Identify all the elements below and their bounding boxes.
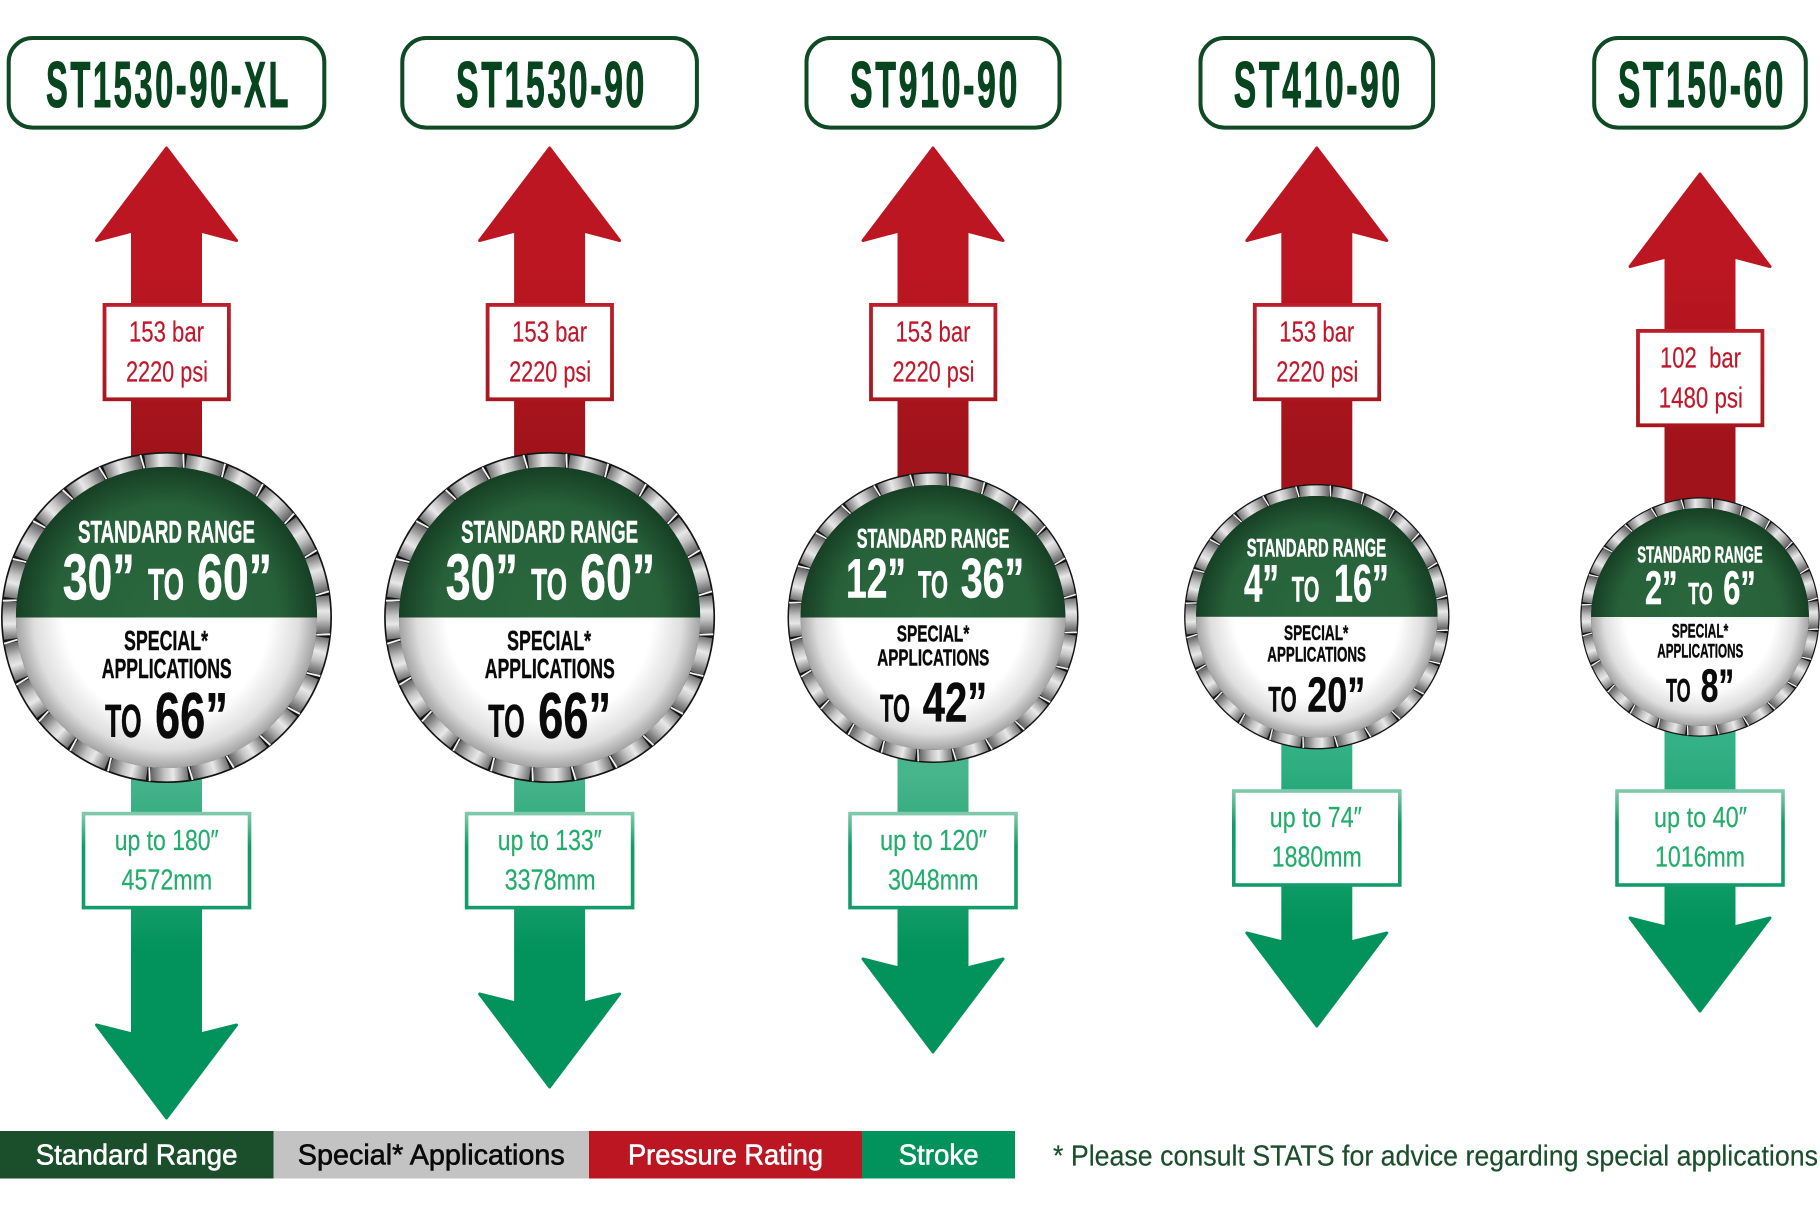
arrow: stroke down xyxy=(1247,640,1387,1026)
range dial: SPECIAL* xyxy=(507,625,591,656)
arrow: stroke down xyxy=(96,640,236,1118)
arrow: stroke down xyxy=(480,640,620,1087)
stroke label xyxy=(84,814,250,908)
range dial: TO xyxy=(488,695,525,747)
panel: ST1530-90 column xyxy=(384,38,715,1087)
range dial: TO xyxy=(918,563,948,605)
range dial: 30” xyxy=(446,540,518,613)
stroke label: up to 180″ xyxy=(115,825,219,857)
range dial: APPLICATIONS xyxy=(102,653,232,684)
stroke label: up to 120″ xyxy=(880,825,987,857)
range dial: SPECIAL* xyxy=(897,621,970,647)
pressure rating label xyxy=(1255,305,1379,399)
stroke label: 4572mm xyxy=(122,864,212,896)
range dial: APPLICATIONS xyxy=(877,645,989,671)
range dial: TO xyxy=(105,695,142,747)
model heading: ST1530-90-XL xyxy=(9,38,324,128)
arrow: pressure rating up xyxy=(1630,174,1770,600)
arrow: pressure rating up xyxy=(480,148,620,600)
legend: special applications xyxy=(274,1131,589,1178)
range dial: 4” xyxy=(1244,555,1279,614)
panel: ST1530-90-XL column xyxy=(1,38,332,1118)
panel: ST410-90 column xyxy=(1184,38,1450,1026)
model heading: ST1530-90: ST1530-90 xyxy=(456,48,647,121)
range dial: 12” xyxy=(846,546,906,609)
panel: ST150-60 column xyxy=(1580,38,1820,1011)
legend bar xyxy=(0,1131,1015,1178)
range dial: 20” xyxy=(1307,669,1365,723)
arrow: stroke down xyxy=(1630,640,1770,1011)
range dial: APPLICATIONS xyxy=(1267,644,1366,667)
range dial xyxy=(788,472,1078,763)
pressure rating label: 1480 psi xyxy=(1659,383,1743,415)
range dial: TO xyxy=(531,560,567,609)
range dial: STANDARD RANGE xyxy=(461,514,638,550)
pressure rating label: 2220 psi xyxy=(509,357,591,389)
range dial: 66” xyxy=(538,679,611,752)
arrow: stroke down xyxy=(863,640,1003,1052)
range dial: STANDARD RANGE xyxy=(78,514,255,550)
model heading: ST910-90 xyxy=(806,38,1060,128)
range dial: TO xyxy=(1268,681,1297,720)
range dial: APPLICATIONS xyxy=(485,653,615,684)
model heading: ST1530-90-XL: ST1530-90-XL xyxy=(46,48,291,121)
legend: pressure rating xyxy=(589,1131,862,1178)
legend: standard range: Standard Range xyxy=(36,1140,238,1172)
stroke label: up to 74″ xyxy=(1270,802,1362,834)
stroke label: up to 40″ xyxy=(1654,802,1747,834)
stroke label xyxy=(467,814,633,908)
legend: stroke: Stroke xyxy=(899,1140,979,1172)
range dial: SPECIAL* xyxy=(124,625,208,656)
range dial: STANDARD RANGE xyxy=(857,523,1009,553)
arrow: pressure rating up xyxy=(863,148,1003,600)
range dial xyxy=(1580,497,1820,737)
legend: pressure rating: Pressure Rating xyxy=(628,1140,823,1172)
pressure rating label xyxy=(871,305,995,399)
pressure rating label: 153 bar xyxy=(1279,317,1355,349)
range dial: 36” xyxy=(961,546,1024,609)
stroke label xyxy=(1234,791,1400,885)
range dial: 8” xyxy=(1701,660,1734,712)
range dial: TO xyxy=(1666,673,1691,709)
range dial: 42” xyxy=(923,671,987,734)
range dial: STANDARD RANGE xyxy=(1247,535,1386,563)
legend: stroke xyxy=(862,1131,1015,1178)
model heading: ST910-90: ST910-90 xyxy=(850,48,1020,121)
pressure rating label: 102 bar xyxy=(1660,343,1741,375)
range dial: TO xyxy=(1292,571,1319,610)
pressure rating label: 153 bar xyxy=(512,317,587,349)
stroke label: up to 133″ xyxy=(498,825,602,857)
pressure rating label xyxy=(104,305,229,399)
range dial xyxy=(1,452,332,783)
pressure rating label: 2220 psi xyxy=(892,357,974,389)
pressure rating label xyxy=(488,305,612,399)
range dial: 60” xyxy=(197,540,272,613)
pressure rating label: 2220 psi xyxy=(126,357,208,389)
range dial: APPLICATIONS xyxy=(1657,642,1743,663)
stroke label xyxy=(1617,791,1783,885)
stroke label: 1880mm xyxy=(1272,842,1362,874)
model heading: ST150-60 xyxy=(1594,38,1806,128)
range dial: 60” xyxy=(580,540,655,613)
range dial: 30” xyxy=(63,540,135,613)
panel: ST910-90 column xyxy=(788,38,1078,1052)
stroke label: 3378mm xyxy=(505,864,596,896)
stroke label: 1016mm xyxy=(1655,842,1745,874)
stroke label: 3048mm xyxy=(888,864,978,896)
range dial: TO xyxy=(880,688,910,731)
pressure rating label: 2220 psi xyxy=(1276,357,1358,389)
pressure rating label: 153 bar xyxy=(896,317,971,349)
range dial xyxy=(384,452,715,783)
legend: standard range xyxy=(0,1131,274,1178)
model heading: ST410-90 xyxy=(1200,38,1433,128)
range dial: 66” xyxy=(155,679,228,752)
pressure rating label xyxy=(1638,331,1762,425)
legend: special applications: Special* Applications xyxy=(298,1140,565,1172)
range dial: TO xyxy=(148,560,184,609)
stroke label xyxy=(850,814,1016,908)
arrow: pressure rating up xyxy=(1247,148,1387,600)
range dial xyxy=(1184,484,1450,749)
arrow: pressure rating up xyxy=(96,148,236,600)
model heading: ST1530-90 xyxy=(402,38,697,128)
range dial: 2” xyxy=(1645,562,1678,615)
range dial: SPECIAL* xyxy=(1284,622,1349,645)
range dial: 16” xyxy=(1334,555,1389,614)
range dial: 6” xyxy=(1723,562,1756,615)
pressure rating label: 153 bar xyxy=(129,317,204,349)
model heading: ST410-90: ST410-90 xyxy=(1234,48,1403,121)
range dial: SPECIAL* xyxy=(1672,622,1729,643)
range dial: TO xyxy=(1688,576,1713,611)
